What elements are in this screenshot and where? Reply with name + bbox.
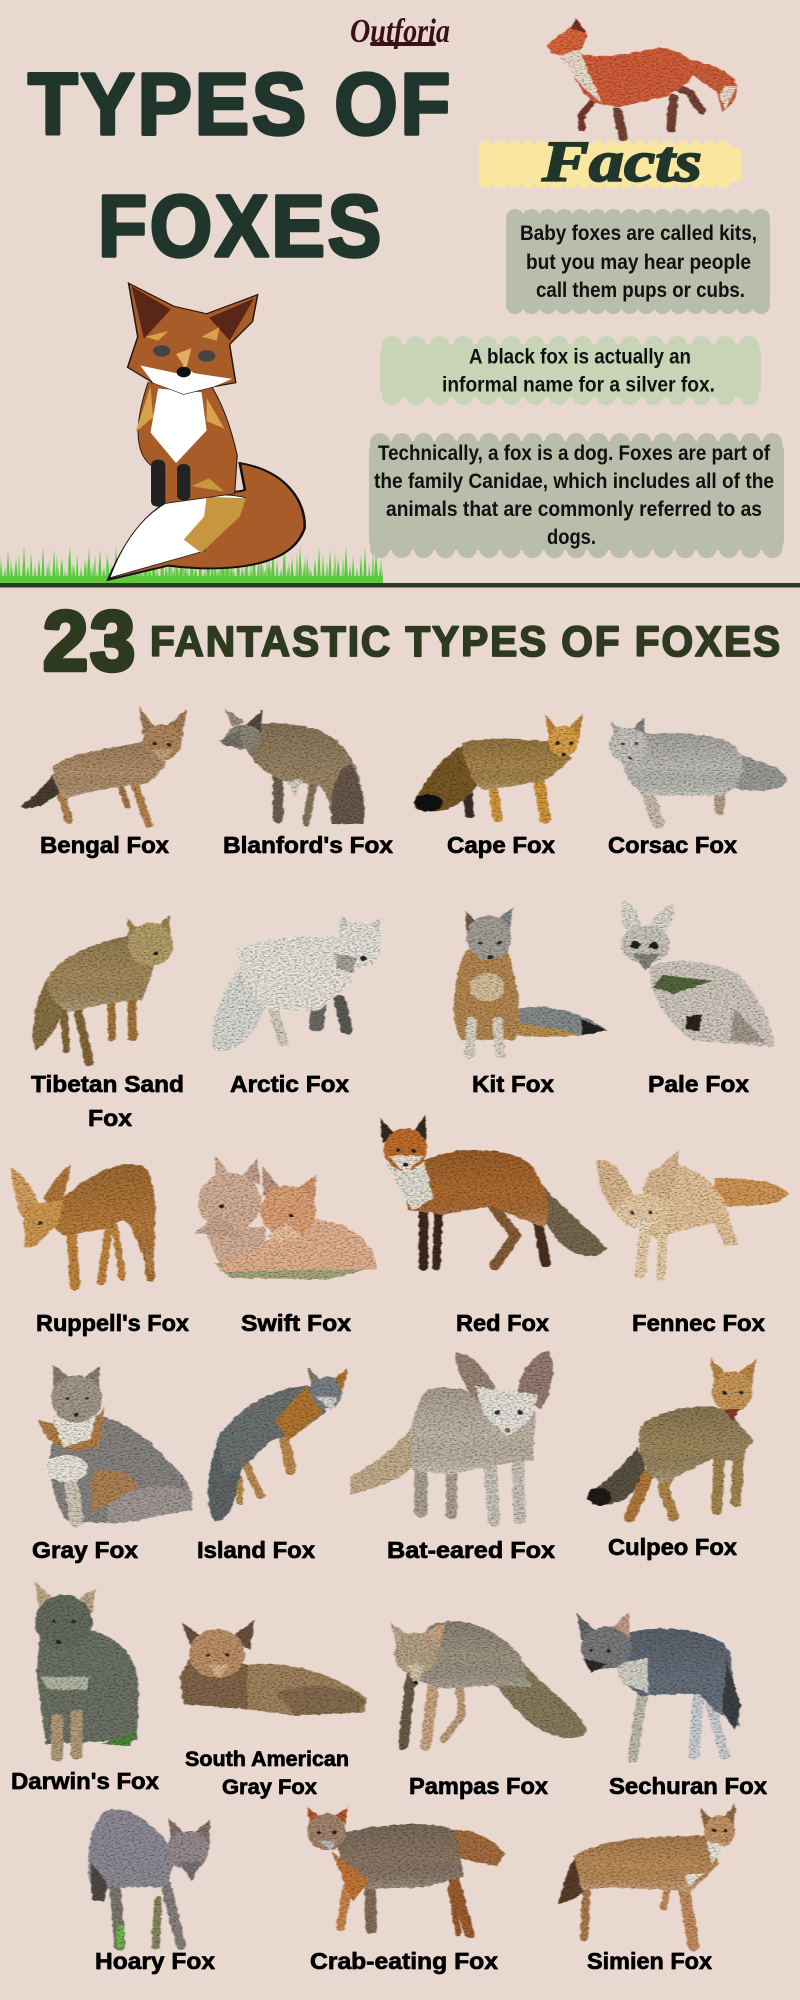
panel: fact about kits xyxy=(506,216,770,307)
label: Crab-eating Fox: Crab-eating Fox xyxy=(310,1948,498,1974)
label: Island Fox: Island Fox xyxy=(197,1537,315,1563)
label: Pale Fox: Pale Fox xyxy=(648,1071,749,1097)
label: Tibetan Sand Fox: Fox xyxy=(88,1105,132,1131)
section heading: FANTASTIC TYPES OF FOXES xyxy=(150,618,782,666)
icon: Kit Fox xyxy=(454,906,607,1055)
label: Arctic Fox: Arctic Fox xyxy=(230,1071,349,1097)
icon: Swift Fox xyxy=(194,1156,377,1280)
label: Fennec Fox: Fennec Fox xyxy=(632,1310,765,1336)
icon: Sechuran Fox xyxy=(577,1613,741,1759)
label: Pampas Fox: Pampas Fox xyxy=(409,1773,548,1799)
section heading: 23 xyxy=(43,594,137,688)
illustration: cartoon sitting fox xyxy=(108,283,305,580)
icon: Island Fox xyxy=(208,1367,348,1522)
label: Bat-eared Fox: Bat-eared Fox xyxy=(387,1537,555,1563)
title: FOXES xyxy=(98,178,384,275)
label: Culpeo Fox: Culpeo Fox xyxy=(608,1534,737,1560)
icon: Blanford's Fox xyxy=(218,709,365,824)
label: South American Gray Fox xyxy=(185,1748,349,1799)
icon: Tibetan Sand Fox xyxy=(33,915,173,1063)
icon: Bat-eared Fox xyxy=(351,1351,553,1521)
label: Simien Fox: Simien Fox xyxy=(587,1948,712,1974)
label: Ruppell's Fox: Ruppell's Fox xyxy=(36,1310,189,1336)
label: Swift Fox: Swift Fox xyxy=(241,1310,351,1336)
icon: Ruppell's Fox xyxy=(11,1164,155,1286)
panel: fact about canidae: animals that are commonly referred to as xyxy=(386,498,762,521)
panel: fact about black fox: A black fox is actually an xyxy=(469,346,691,368)
icon: Simien Fox xyxy=(557,1804,736,1946)
label: Tibetan Sand Fox xyxy=(31,1071,184,1131)
icon: Fennec Fox xyxy=(597,1151,788,1278)
title: TYPES OF xyxy=(28,56,453,153)
label: Corsac Fox: Corsac Fox xyxy=(608,832,737,858)
icon: Pale Fox xyxy=(621,899,774,1047)
panel: fact about black fox: informal name for a silver fox. xyxy=(442,374,715,396)
label: Red Fox: Red Fox xyxy=(456,1310,549,1336)
icon: Gray Fox xyxy=(38,1364,193,1523)
panel: fact about kits: call them pups or cubs. xyxy=(536,279,745,302)
label: South American Gray Fox: South American xyxy=(185,1748,349,1771)
title xyxy=(28,56,453,275)
panel: fox rows one to three xyxy=(11,706,788,1336)
icon: Hoary Fox xyxy=(88,1809,210,1946)
panel: Facts heading xyxy=(479,129,742,194)
label: Blanford's Fox: Blanford's Fox xyxy=(223,832,393,858)
icon: Crab-eating Fox xyxy=(307,1807,505,1933)
label: Gray Fox: Gray Fox xyxy=(32,1537,138,1563)
section heading xyxy=(43,594,782,688)
icon: Red Fox xyxy=(380,1114,607,1267)
fox tail xyxy=(108,463,305,580)
panel: fox rows four to six xyxy=(11,1351,767,1974)
icon: Culpeo Fox xyxy=(587,1358,757,1517)
panel: fact about canidae: dogs. xyxy=(547,526,596,549)
label: Hoary Fox: Hoary Fox xyxy=(95,1948,215,1974)
icon: South American Gray Fox xyxy=(180,1620,366,1715)
icon: Pampas Fox xyxy=(390,1621,587,1746)
icon: Darwin's Fox xyxy=(35,1581,139,1757)
icon: Arctic Fox xyxy=(212,916,381,1052)
label: Darwin's Fox: Darwin's Fox xyxy=(11,1768,159,1794)
label: South American Gray Fox: Gray Fox xyxy=(222,1776,317,1799)
panel: fact about canidae xyxy=(369,441,784,550)
icon: Bengal Fox xyxy=(21,706,187,825)
label: Bengal Fox: Bengal Fox xyxy=(40,832,169,858)
illustration: watercolor fox xyxy=(547,18,737,139)
label: Cape Fox: Cape Fox xyxy=(447,832,555,858)
panel: Facts heading: Facts xyxy=(541,129,702,194)
icon: Cape Fox xyxy=(414,714,583,819)
fox torso xyxy=(138,383,237,505)
icon: Corsac Fox xyxy=(609,717,787,823)
panel: fact about black fox xyxy=(380,344,761,397)
label: Tibetan Sand Fox: Tibetan Sand xyxy=(31,1071,184,1097)
fox head xyxy=(128,283,258,394)
panel: fact about kits: but you may hear people xyxy=(526,251,751,274)
logo: Outforia: Outforia xyxy=(350,13,450,50)
illustration: grass strip xyxy=(0,541,383,583)
label: Kit Fox: Kit Fox xyxy=(472,1071,554,1097)
panel: fact about kits: Baby foxes are called kits, xyxy=(520,222,757,245)
label: Sechuran Fox: Sechuran Fox xyxy=(609,1773,767,1799)
